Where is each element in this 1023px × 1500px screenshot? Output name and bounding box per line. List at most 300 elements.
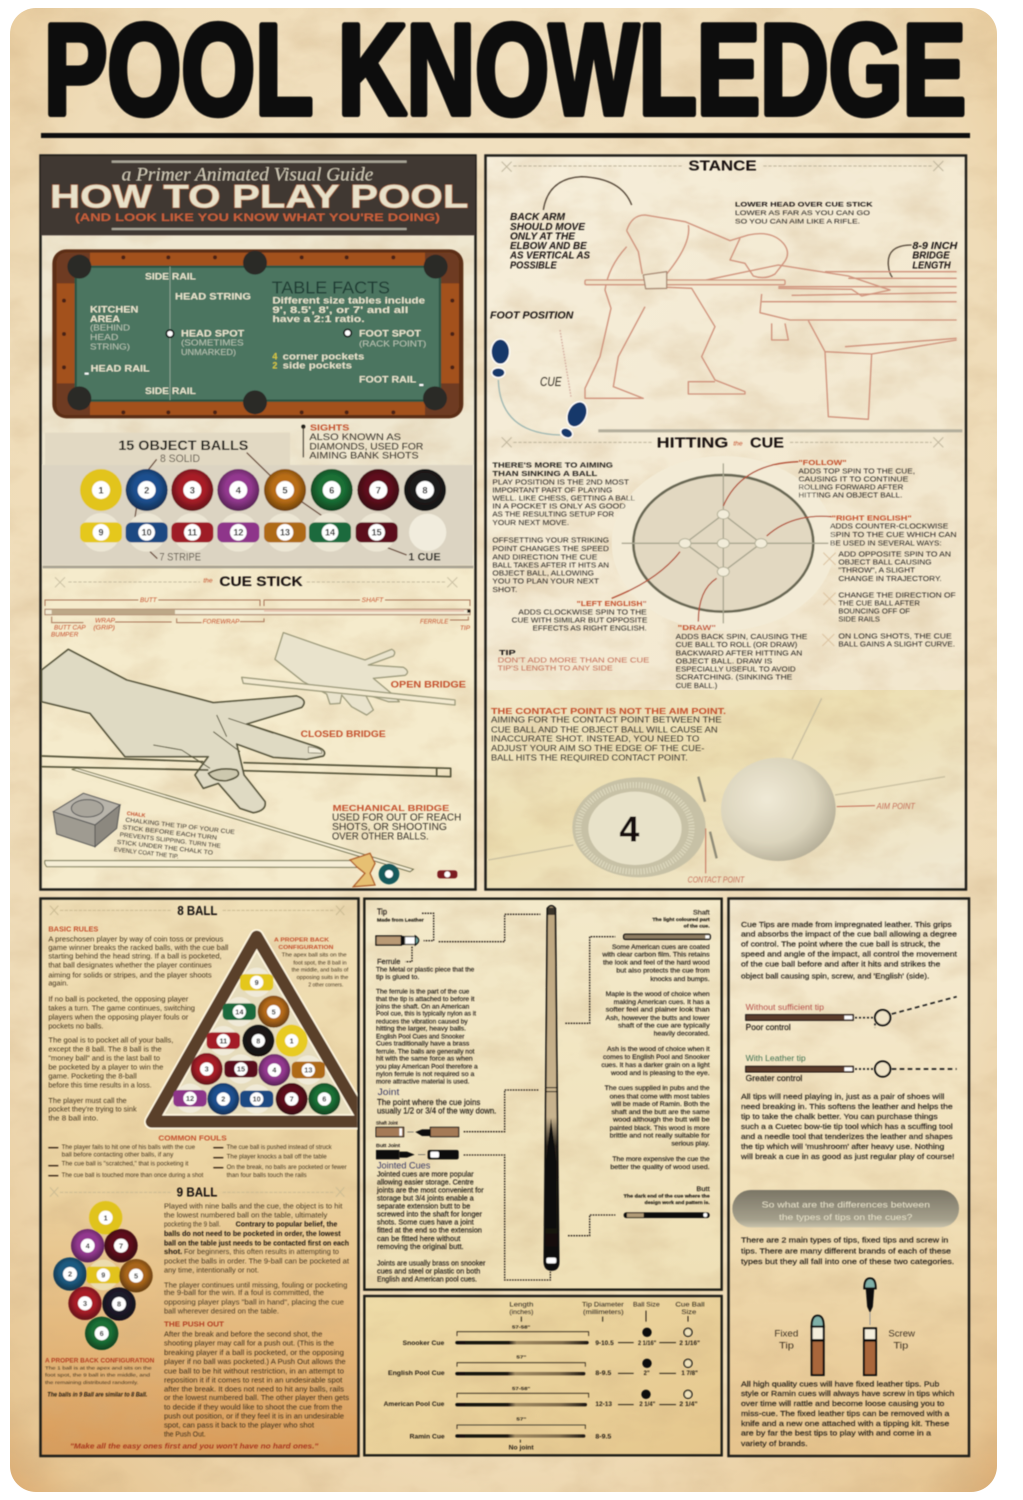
contact point diagram: CONTACT POINT [688, 874, 745, 884]
text: right english: SIDE RAILS [838, 617, 880, 624]
bridge length note: 8-9 INCH [912, 241, 958, 252]
callout: sights: SIGHTS [310, 422, 350, 432]
icon: chalk cube [53, 793, 120, 847]
text: common fouls: The cue ball is touched more than once during a shot [62, 1173, 204, 1179]
triangle rack with balls: 8 [256, 1036, 260, 1045]
text: aiming intro: BALL TAKES AFTER IT HITS AN [492, 562, 609, 569]
tip and ferrule notes: nylon ferrule is not required so a [376, 1071, 475, 1078]
pool table diagram: HEAD SPOT [181, 329, 245, 339]
diagram: with leather tip: Greater control [746, 1074, 803, 1083]
shaft notes [601, 909, 711, 1171]
triangle rack with balls [152, 937, 365, 1122]
shaft notes: serious play. [671, 1141, 710, 1148]
butt notes: design work and pattern is. [645, 1200, 710, 1205]
panel: how to play pool (top left) [40, 156, 476, 890]
text: right english: BALL GAINS A SLIGHT CURVE. [838, 642, 955, 649]
cue stick parts diagram: BUTT CAP [54, 624, 86, 631]
row: english pool cue: 2" [644, 1371, 650, 1377]
solid balls row: 6 [329, 485, 334, 495]
text: aiming intro: PLAY POSITION IS THE 2ND MOST [492, 479, 630, 486]
dotted connectors [405, 913, 615, 1280]
cue stick parts diagram: WRAP [95, 618, 116, 625]
shaft notes: with clear carbon film. This retains [601, 952, 710, 959]
striped balls row: 12 [233, 527, 243, 537]
text: basic rules: pocket they're trying to sink [48, 1105, 137, 1114]
callout: proper back configuration: The apex ball sits on the [282, 953, 347, 959]
triangle rack with balls: 10 [253, 1095, 261, 1104]
text: left english: EFFECTS AS RIGHT ENGLISH. [533, 626, 647, 633]
text: common fouls: On the break, no balls are pocketed or fewer [227, 1165, 347, 1171]
callout: proper back configuration [274, 938, 349, 988]
text: playing in tips [740, 1092, 954, 1161]
shaft notes: ones that come with most tables [610, 1093, 710, 1100]
text: aiming intro: YOUR NEXT MOVE. [492, 520, 569, 527]
pool table diagram: UNMARKED) [181, 347, 236, 357]
triangle rack with balls: 3 [205, 1065, 209, 1074]
pool table diagram: FOOT SPOT [359, 329, 422, 339]
triangle rack with balls: 14 [235, 1007, 244, 1016]
nine ball diamond rack: 4 [86, 1241, 91, 1250]
callout: proper back configuration: opposing suits in the [297, 975, 348, 981]
shaft notes: comes to English Pool and Snooker [603, 1054, 710, 1061]
mechanical bridge: SHOTS, OR SHOOTING [332, 822, 447, 833]
text: right english: "RIGHT ENGLISH" [832, 516, 912, 523]
text: common fouls: The player fails to hit one of his balls with the cue [62, 1145, 196, 1151]
diagram: without sufficient tip [746, 997, 957, 1032]
chalk tip text: CHALK [126, 811, 146, 819]
shaft notes: The light coloured part [652, 917, 710, 922]
solid balls row: 2 [144, 485, 149, 495]
banner: how to play pool: HOW TO PLAY POOL [50, 177, 468, 214]
text: contact point [491, 706, 726, 762]
column headers [509, 1302, 705, 1322]
text: fixed leather tips: are by far the best tips to play with and come in a [741, 1428, 932, 1437]
text: follow: ADDS TOP SPIN TO THE CUE, [798, 468, 915, 475]
text: right english: OBJECT BALL CAUSING [838, 560, 932, 567]
pool table diagram: 9', 8.5', 8', or 7' and all [272, 305, 408, 315]
labels: tip types [774, 1329, 915, 1350]
jointed cues notes: removing the original butt. [377, 1244, 464, 1251]
row: snooker cue [403, 1324, 700, 1347]
text: aiming intro [492, 463, 635, 594]
section: hitting the cue: the [733, 440, 743, 447]
text: fixed leather tips: miss-cue. The fixed leather tips can be removed with a [741, 1409, 950, 1418]
text: types of tips: There are 2 main types of tips, fixed tips and screw in [741, 1236, 948, 1245]
cue stick parts diagram: BUMPER [51, 632, 79, 639]
caption: proper back configuration: A PROPER BACK CONFIGURATION [45, 1358, 154, 1364]
text: contact point: BALL HITS THE REQUIRED CONTACT POINT. [491, 752, 688, 762]
row: english pool cue: 8-9.5 [595, 1371, 612, 1377]
section: 15 object balls: 7 STRIPE [159, 552, 201, 564]
callout: proper back configuration: 2 other corners. [308, 982, 343, 988]
column headers: Tip Diameter [582, 1302, 625, 1309]
text: nine ball rules: any time, intentionally or not. [164, 1266, 259, 1275]
row: english pool cue [388, 1354, 698, 1377]
row: snooker cue: Snooker Cue [403, 1341, 445, 1347]
text: nine ball rules: The player continues until missing, fouling or pocketing [164, 1280, 347, 1289]
tip and ferrule notes: English Pool Cues and Snooker [376, 1033, 465, 1040]
tip and ferrule notes: The ferrule is the part of the cue [376, 988, 470, 995]
caption: proper back configuration [45, 1358, 154, 1399]
text: draw: OBJECT BALL. DRAW IS [676, 658, 773, 665]
text: types of tips [741, 1236, 954, 1266]
text: playing in tips: need breaking in. This softens the leather and helps the [741, 1102, 953, 1111]
section: 8 ball [48, 903, 365, 1179]
row: american pool cue: 57-58" [512, 1386, 531, 1392]
jointed cues notes: shots. Some cues have a joint [377, 1219, 474, 1226]
chalk tip text: STICK UNDER THE CHALK TO [116, 840, 214, 857]
section: 8 ball: 8 BALL [177, 903, 217, 918]
text: right english: ON LONG SHOTS, THE CUE [838, 633, 952, 640]
triangle rack with balls: 12 [186, 1094, 194, 1103]
butt notes: The dark end of the cue where the [624, 1193, 710, 1198]
shaft notes: softer feel and plainer look than [606, 1007, 710, 1014]
text: tip: DON'T ADD MORE THAN ONE CUE [498, 656, 649, 665]
text: types of tips: tips. There are many different brands of each of these [741, 1246, 951, 1255]
text: nine ball rules: For beginners, this often results in attempting to [184, 1247, 339, 1256]
chalk tip text: CHALKING THE TIP OF YOUR CUE [125, 818, 235, 836]
tip and ferrule notes: more attractive material is used. [376, 1078, 469, 1085]
text: cue tips intro: and absorbs the impact of the cue ball allowing a degree [741, 930, 957, 939]
section: cue stick [42, 573, 471, 887]
jointed cues notes: fitted at the end so the extension [377, 1227, 482, 1234]
text: common fouls: The cue ball is "scratched," that is pocketing it [62, 1162, 189, 1168]
banner: how to play pool: (AND LOOK LIKE YOU KNOW WHAT YOU'RE DOING) [75, 212, 440, 224]
quote: "Make all the easy ones first and you won't have no hard ones." [70, 1443, 319, 1450]
text: basic rules: takes a turn. The game continues, switching [48, 1004, 195, 1013]
foot position diagram: FOOT POSITION [490, 310, 574, 321]
shaft notes: the look and feel of the hard wood [603, 959, 710, 966]
text: contact point: AIMING FOR THE CONTACT POINT BETWEEN THE [491, 715, 722, 725]
caption: proper back configuration: the remaining distributed randomly. [45, 1380, 138, 1386]
text: nine ball rules: shot. [164, 1247, 182, 1256]
tip and ferrule notes: hit with the same force as when [376, 1056, 473, 1063]
caption: proper back configuration: The 1 ball is at the apex and sits on the [45, 1365, 152, 1371]
striped balls row: 13 [280, 527, 290, 537]
shaft notes: Some American cues are coated [612, 944, 710, 951]
shaft notes: Ash, however the butts and lower [606, 1015, 710, 1022]
text: aiming intro: AND DIRECTION THE CUE [492, 554, 598, 561]
text: nine ball rules [164, 1201, 349, 1315]
shaft notes: making American cues. It has a [614, 999, 710, 1006]
labels: tip types: Fixed [774, 1329, 798, 1339]
tip and ferrule notes: Ferrule [377, 957, 400, 966]
triangle rack with balls: 11 [219, 1036, 227, 1045]
text: the push out: shooting player may call for a push out. (This is the [164, 1339, 334, 1348]
section: 15 object balls: 15 OBJECT BALLS [118, 437, 248, 453]
solid balls row: 5 [282, 485, 288, 495]
solid balls row: 3 [190, 485, 195, 495]
jointed cues notes: Joints are usually brass on snooker [377, 1261, 486, 1268]
jointed cues notes: separate extension butt to be [377, 1203, 470, 1210]
text: right english: BOUNCING OFF OF [838, 609, 910, 616]
row: american pool cue: 2 1/4" [639, 1402, 655, 1408]
text: basic rules: players when the opposing player fouls or [48, 1012, 189, 1021]
shaft notes: shaft of the cue are typically [618, 1023, 710, 1030]
shaft notes: will be made of Ramin. Both the [610, 1101, 710, 1108]
pool table diagram: AREA [90, 314, 121, 324]
text: the push out: the Push Out. [164, 1430, 206, 1439]
shaft notes: Maple is the wood of choice when [606, 991, 710, 998]
text: fixed leather tips: style or Ramin cues will always have screw in tips which [741, 1389, 954, 1398]
callout: sights: DIAMONDS, USED FOR [309, 441, 424, 451]
text: the push out: reposition it if it comes to rest in an undesirable spot [164, 1375, 342, 1384]
text: aiming intro: OBJECT BALL, ALLOWING [492, 570, 594, 577]
lower cue tips content [732, 1190, 959, 1448]
jointed cues notes: cues and steel or plastic on both [377, 1269, 480, 1276]
row: snooker cue: 57-58" [512, 1324, 531, 1330]
section: stance [490, 159, 962, 440]
cue stick parts diagram [45, 597, 471, 639]
shaft notes: wood although the butt will be [612, 1117, 710, 1124]
lower head note: LOWER HEAD OVER CUE STICK [735, 202, 873, 209]
text: left english [512, 601, 648, 633]
text: follow [798, 460, 915, 500]
joint notes: Butt Joint [376, 1143, 401, 1148]
text: fixed leather tips: variety of brands. [741, 1439, 808, 1448]
text: cue tips intro [741, 920, 958, 980]
tip and ferrule notes: that the tip is attached to before it [376, 996, 474, 1003]
open bridge hand [242, 633, 455, 715]
text: right english: THE CUE BALL AFTER [838, 601, 920, 608]
shaft notes: Shaft [693, 909, 710, 916]
section: 15 object balls: 8 SOLID [160, 453, 200, 465]
shaft notes: The cues supplied in pubs and the [605, 1085, 710, 1092]
labels: tip types: Tip [893, 1340, 908, 1350]
text: right english: ADD OPPOSITE SPIN TO AN [838, 552, 951, 559]
text: left english: "LEFT ENGLISH" [577, 601, 647, 608]
joint notes: The point where the cue joins [377, 1098, 480, 1107]
pool table diagram: SIDE RAIL [145, 386, 197, 396]
text: nine ball rules: the 9-ball for the win. If a foul is committed, the [164, 1288, 324, 1297]
text: nine ball rules: balls do not need to be pocketed in order, the lowest [164, 1229, 341, 1238]
row: american pool cue: 2 1/4" [679, 1402, 698, 1408]
back arm note: SHOULD MOVE [510, 222, 585, 233]
pool table diagram [52, 249, 463, 418]
pool table diagram: KITCHEN [90, 305, 138, 315]
triangle rack with balls: 6 [322, 1095, 326, 1104]
nine ball diamond rack: 1 [104, 1213, 108, 1222]
jointed cues notes: Jointed cues are more popular [377, 1172, 474, 1179]
tip and ferrule notes: reduces the vibration caused by [376, 1018, 468, 1025]
pool table diagram: HEAD [90, 332, 118, 342]
section: 9 ball [45, 1185, 349, 1450]
nine ball diamond rack: 6 [100, 1329, 104, 1338]
tip and ferrule notes: The Metal or plastic piece that the [376, 967, 475, 974]
pool table diagram: SIDE RAIL [145, 271, 197, 281]
text: the push out: or the lowest numbered ball. The other player then gets [164, 1393, 349, 1402]
tip and ferrule notes: tip is glued to. [376, 974, 419, 981]
row: snooker cue: 2 1/16" [679, 1341, 700, 1347]
callout pill: differences between tips: the types of tips on the cues? [779, 1212, 913, 1222]
cue stick parts diagram: FERRULE [420, 618, 449, 625]
shaft notes: cues. It has a darker grain on a light [601, 1062, 710, 1069]
panel: cue anatomy (bottom middle) [364, 899, 722, 1290]
foot position diagram: CUE [540, 374, 563, 389]
nine ball diamond rack: 8 [117, 1300, 121, 1309]
text: draw: "DRAW" [678, 625, 716, 632]
text: common fouls: The player knocks a ball off the table [227, 1154, 327, 1160]
chalk tip text: STICK BEFORE EACH TURN [122, 825, 217, 842]
text: the push out: cue ball to be hit without restriction, in an attempt to [164, 1366, 344, 1375]
pool table diagram: 2 [272, 361, 277, 371]
section: cue stick: OPEN BRIDGE [391, 679, 466, 689]
chalk tip text: EVENLY COAT THE TIP. [114, 847, 179, 861]
text: cue tips intro: of the cue ball before and after it hits and strikes the [741, 960, 940, 969]
icon: fixed tip [812, 1316, 824, 1375]
text: basic rules: BASIC RULES [48, 925, 98, 934]
back arm note [509, 212, 590, 272]
mechanical bridge [45, 768, 461, 887]
shaft notes: painted black. This wood is more [610, 1125, 710, 1132]
column headers: Cue Ball [675, 1302, 705, 1309]
nine ball diamond rack: 9 [101, 1271, 105, 1280]
text: nine ball rules: pocketing the 9 ball. [164, 1220, 221, 1229]
text: common fouls: ball before contacting other balls, if any [62, 1152, 173, 1158]
pool table diagram: (RACK POINT) [359, 338, 426, 348]
callout pill: differences between tips: So what are the differences between [762, 1199, 930, 1209]
cue stick parts diagram: BUTT [140, 597, 158, 604]
callout: proper back configuration: CONFIGURATION [278, 945, 333, 951]
striped balls row: 14 [325, 527, 335, 537]
text: basic rules: be pocketed by a player to win the [48, 1063, 163, 1072]
text: the push out [164, 1320, 349, 1439]
pool table diagram: have a 2:1 ratio. [272, 314, 365, 324]
text: right english: CHANGE THE DIRECTION OF [838, 592, 956, 599]
back arm note: ELBOW AND BE [510, 241, 587, 252]
text: playing in tips: the tip which will 'mushroom' after heavy use. Nothing [741, 1142, 944, 1151]
text: types of tips: types but they all fall into one of these two categories. [741, 1257, 954, 1266]
back arm note: POSSIBLE [510, 261, 557, 272]
shaft notes: but also protects the cue from [616, 967, 710, 974]
text: the push out: push out position, or if they feel it is in an undesirable [164, 1411, 344, 1420]
text: tip [498, 648, 649, 673]
text: cue tips intro: speed and angle of the impact, all control the movement [741, 950, 958, 959]
pool table diagram: HEAD RAIL [91, 364, 150, 374]
triangle rack with balls: 5 [272, 1007, 276, 1016]
row: american pool cue [384, 1386, 698, 1408]
text: fixed leather tips [741, 1380, 954, 1448]
text: playing in tips: and a needle tool that tenderizes the leather and shapes [741, 1132, 953, 1141]
tip and ferrule notes: Tip [377, 907, 388, 916]
diagram: without sufficient tip: Without sufficient tip [746, 1003, 825, 1012]
bridge length note [912, 241, 958, 271]
diagram: without sufficient tip: Poor control [746, 1023, 791, 1032]
text: aiming intro: IMPORTANT PART OF PLAYING [492, 487, 612, 494]
upper cue tips content [740, 920, 958, 1161]
text: cue tips intro: object ball causing spin, screw, and 'English' (side). [741, 971, 929, 980]
text: right english: CHANGE IN TRAJECTORY. [838, 576, 942, 583]
text: the push out: After the break and before the second shot, the [164, 1330, 322, 1339]
nine ball diamond rack: 2 [68, 1270, 72, 1279]
back arm note: ONLY AT THE [510, 231, 575, 242]
column headers: Size [681, 1309, 697, 1316]
caption: proper back configuration: foot spot, the 9 ball in the middle, and [45, 1373, 150, 1379]
callout: sights: ALSO KNOWN AS [309, 432, 401, 442]
joint notes [376, 1087, 496, 1159]
section: hitting the cue: HITTING [657, 435, 728, 451]
back arm note: AS VERTICAL AS [509, 251, 590, 262]
bridge length note: BRIDGE [912, 250, 950, 261]
text: aiming intro: WELL. LIKE CHESS, GETTING A BALL [492, 496, 635, 503]
text: fixed leather tips: All high quality cues will have fixed leather tips. Pub [741, 1380, 939, 1389]
bridge length note: LENGTH [912, 260, 951, 271]
row: american pool cue: American Pool Cue [384, 1402, 445, 1408]
panel: cue comparison table [364, 1296, 722, 1455]
text: basic rules: the 8 ball into. [48, 1114, 98, 1123]
pool table diagram: (BEHIND [90, 322, 130, 332]
text: draw [676, 625, 808, 690]
section: cue stick: CLOSED BRIDGE [301, 729, 386, 739]
text: the push out: breaking player if a ball is pocketed, or the opposing [164, 1348, 344, 1357]
row: english pool cue: English Pool Cue [388, 1371, 445, 1377]
text: right english: BE USED IN SEVERAL WAYS: [830, 540, 942, 547]
text: fixed leather tips: knife and a new one attached with a tipping kit. These [741, 1419, 949, 1428]
jointed cues notes [376, 1160, 486, 1284]
shaft notes: heavily decorated. [654, 1031, 710, 1038]
text: nine ball rules: Played with nine balls and the cue, the object is to hit [164, 1201, 342, 1210]
text: contact point: INACCURATE SHOT. INSTEAD, YOU NEED TO [491, 734, 700, 744]
text: cue tips intro: of control. The point where the cue ball is struck, the [741, 940, 940, 949]
pool table diagram: HEAD STRING [175, 292, 251, 302]
text: nine ball rules: opposing player plays "ball in hand", placing the cue [164, 1297, 344, 1306]
callout: proper back configuration: foot spot, the 8 ball in [293, 960, 347, 966]
cue ball [409, 514, 446, 551]
jointed cues notes: can be fitted here without [377, 1236, 460, 1243]
pool table diagram: side pockets [283, 361, 352, 371]
striped balls row [80, 513, 398, 552]
row: american pool cue: 12-13 [595, 1402, 613, 1408]
lower head note [735, 202, 873, 225]
text: basic rules: aiming for solids or stripes, and the player shoots [48, 970, 212, 979]
cue ball strike diagram [612, 456, 835, 631]
shaft notes: The more expensive the cue the [612, 1156, 710, 1163]
text: follow: CAUSING IT TO CONTINUE [798, 476, 909, 483]
diagram: with leather tip: With Leather tip [746, 1054, 806, 1063]
panel: 8 ball and 9 ball (bottom left) [40, 898, 365, 1456]
triangle rack with balls: 7 [290, 1095, 294, 1104]
triangle rack with balls: 15 [237, 1065, 245, 1074]
text: nine ball rules: pocket the balls in order. The 9-ball can be pocketed at [164, 1256, 349, 1265]
text: basic rules: A preschosen player by way of coin toss or previous [48, 935, 224, 944]
text: contact point: CUE BALL AND THE OBJECT BALL WILL CAUSE AN [491, 724, 718, 734]
callout: proper back configuration: the middle, and balls of [292, 968, 349, 974]
solid balls row: 4 [236, 485, 242, 495]
text: draw: ESPECIALLY USEFUL TO AVOID [676, 667, 796, 674]
text: playing in tips: tip to take the chalk better. You can purchase things [741, 1112, 938, 1121]
striped balls row: 11 [188, 527, 197, 537]
text: right english: SPIN TO THE CUE WHICH CAN [830, 532, 957, 539]
text: aiming intro: OFFSETTING YOUR STRIKING [492, 538, 609, 545]
tip and ferrule notes: you play American Pool therefore a [376, 1063, 478, 1070]
lower head note: SO YOU CAN AIM LIKE A RIFLE. [735, 218, 860, 225]
text: nine ball rules: ball wherever desired on the table. [164, 1306, 279, 1315]
nine ball diamond rack: 5 [134, 1271, 138, 1280]
callout: sights [301, 422, 424, 461]
joint notes: Shaft Joint [376, 1120, 399, 1125]
text: playing in tips: will break a cue in as good as just regular play of course! [740, 1152, 954, 1161]
text: draw: CUE BALL TO ROLL (OR DRAW) [676, 642, 797, 649]
pool table diagram: STRING) [90, 342, 130, 352]
section: 15 object balls: 1 CUE [408, 552, 441, 564]
shaft notes: shaft and the butt are the same [611, 1109, 710, 1116]
striped balls row: 10 [142, 527, 152, 537]
triangle rack with balls: 1 [290, 1036, 294, 1045]
mechanical bridge: USED FOR OUT OF REACH [332, 813, 461, 824]
player and table line drawing [585, 215, 957, 419]
text: the push out: to decide if they would like to shoot the cue from the [164, 1402, 342, 1411]
tip and ferrule notes [375, 907, 478, 1085]
